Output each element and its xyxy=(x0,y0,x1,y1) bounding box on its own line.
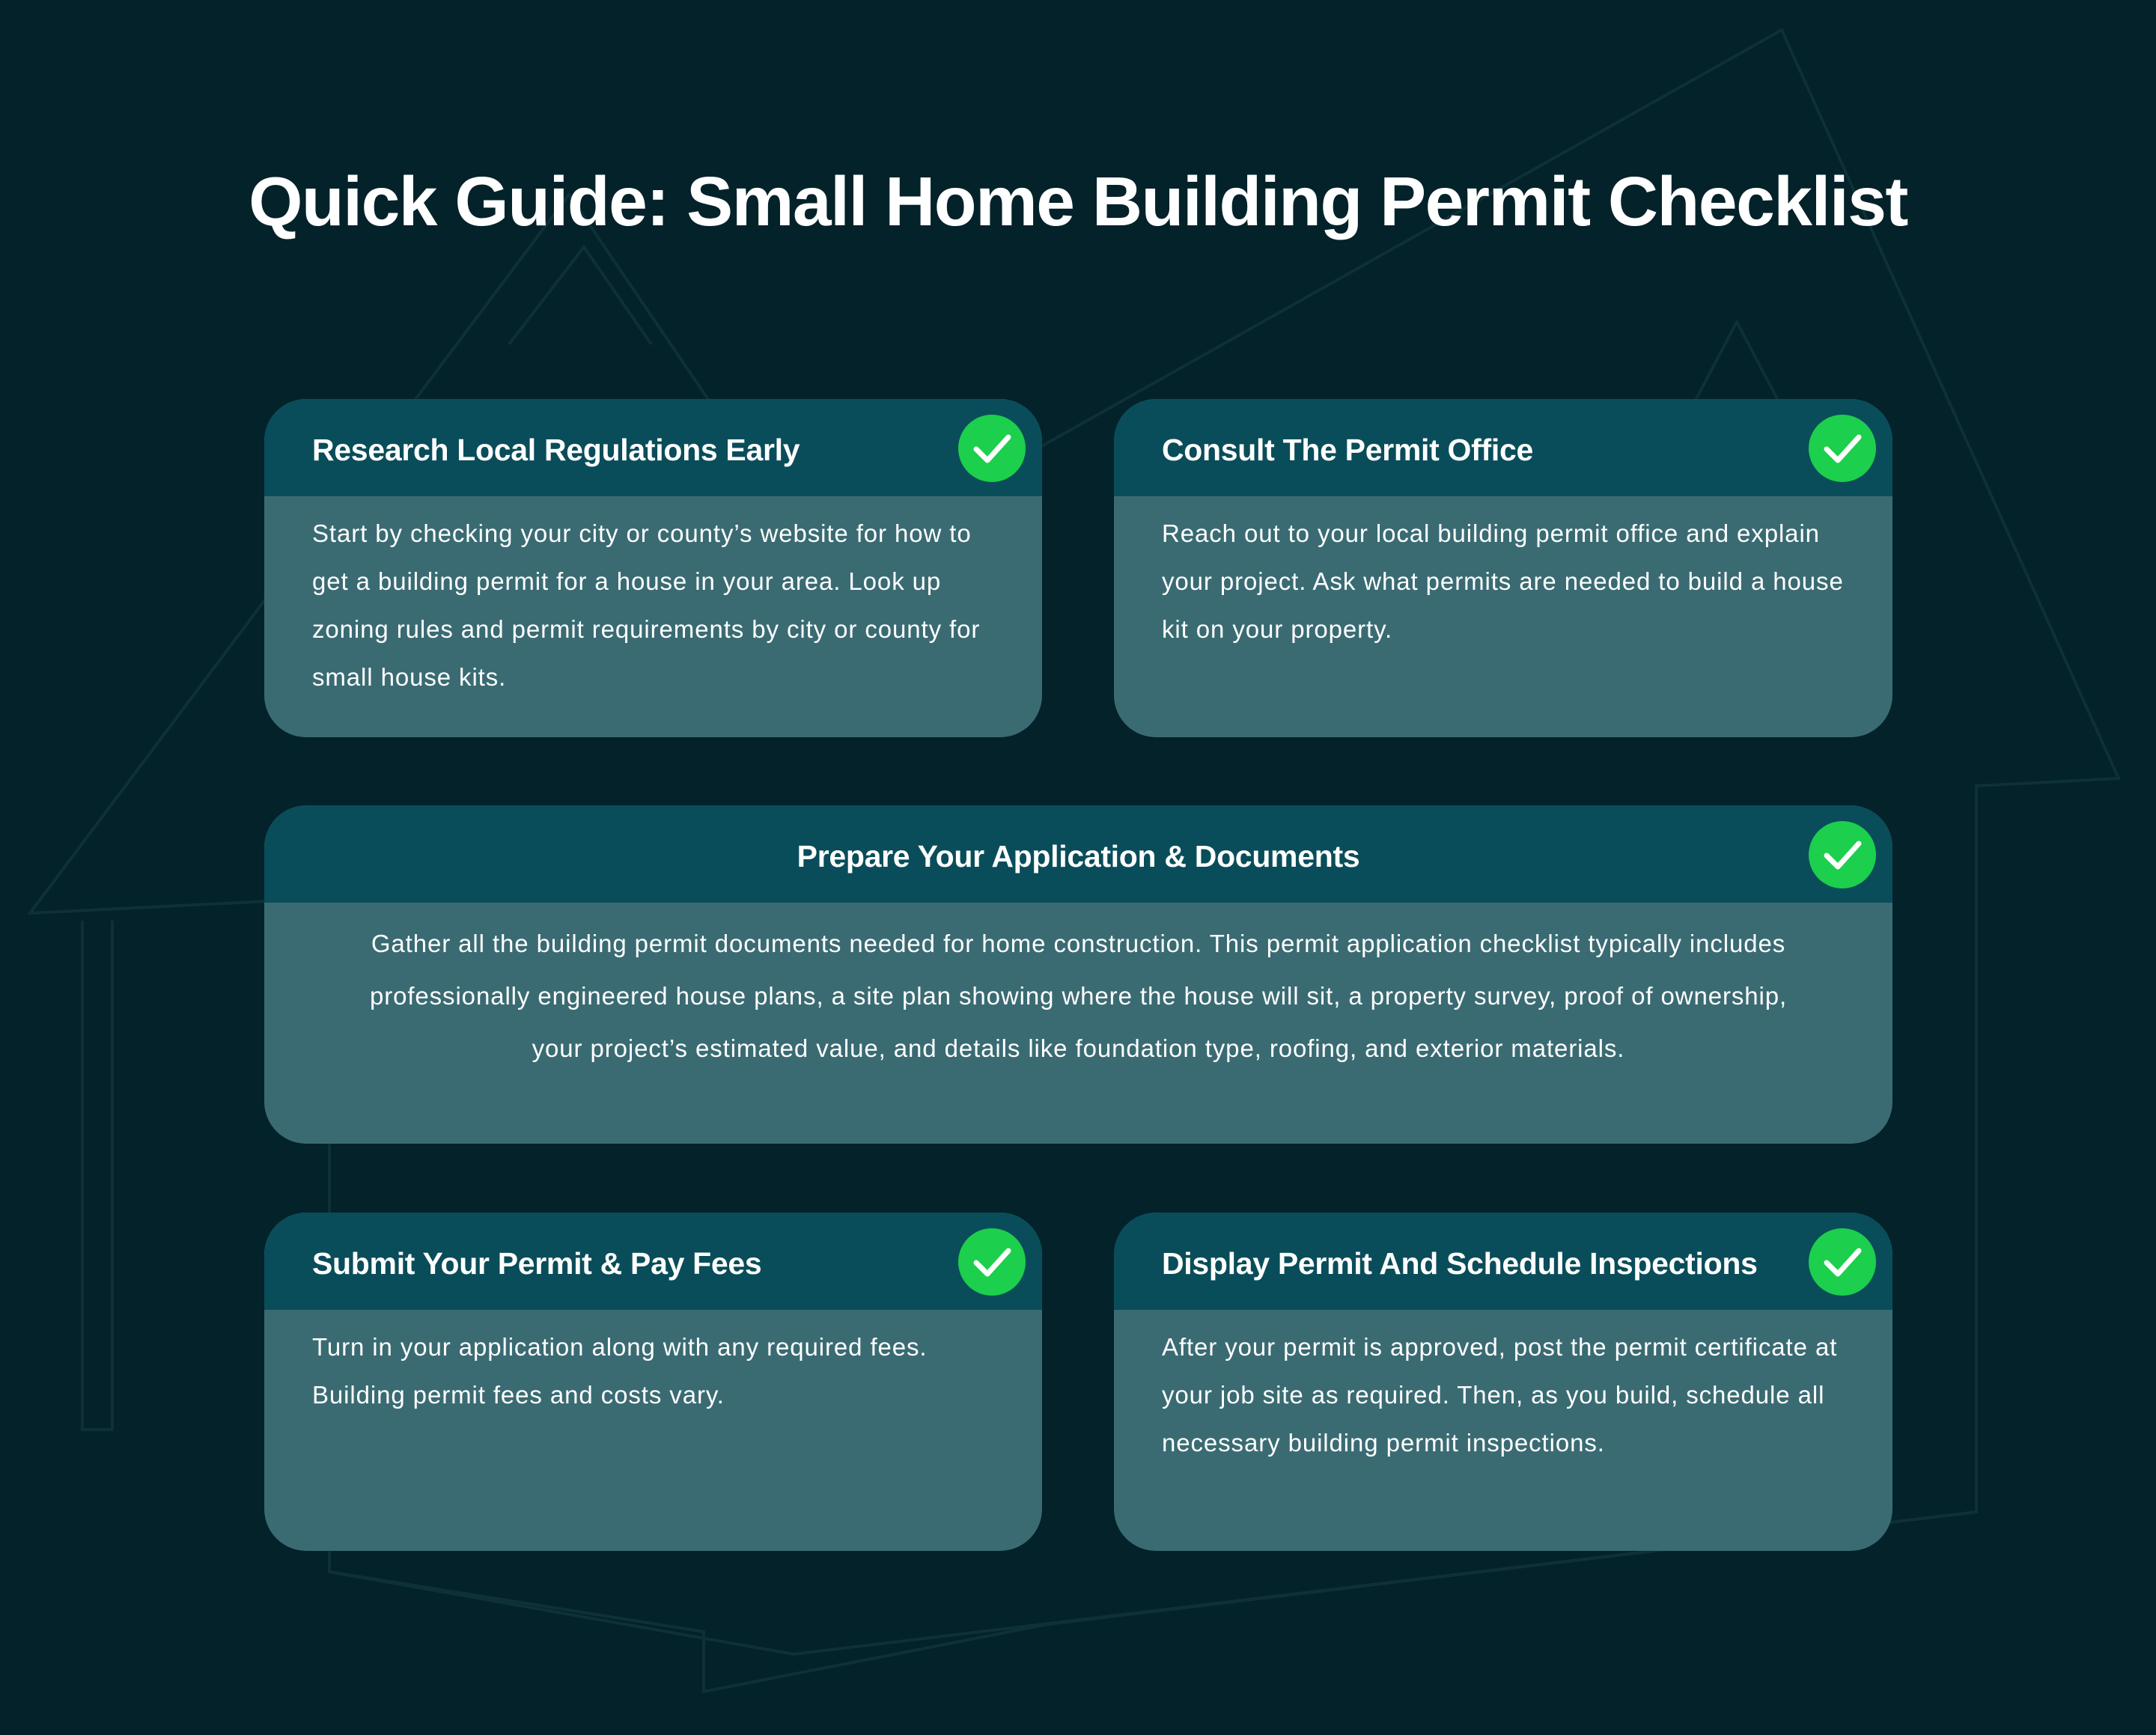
heading xyxy=(264,399,1042,496)
panel: submit permit xyxy=(264,1213,1042,1551)
text block: After your permit is approved, post the permit certificate at your job site as required. Then, as you build, schedule all necessary building permit inspections. xyxy=(1162,1333,1837,1457)
text block: Turn in your application along with any required fees. Building permit fees and costs vary. xyxy=(312,1333,927,1409)
panel: display permit xyxy=(1114,1213,1892,1551)
heading: Display Permit And Schedule Inspections xyxy=(1162,1246,1758,1281)
heading: Prepare Your Application & Documents xyxy=(797,839,1359,873)
panel: research local regulations xyxy=(264,399,1042,737)
heading xyxy=(1114,399,1892,496)
panel: prepare application xyxy=(264,805,1892,1144)
heading xyxy=(264,1213,1042,1310)
title: Quick Guide: Small Home Building Permit Checklist xyxy=(249,162,1907,240)
heading: Consult The Permit Office xyxy=(1162,433,1533,467)
text block: Start by checking your city or county’s website for how to get a building permit for a house in your area. Look up zoning rules and permit requirements by city or county for small house kits. xyxy=(312,519,980,691)
heading xyxy=(264,805,1892,903)
heading xyxy=(1114,1213,1892,1310)
text block: Gather all the building permit documents needed for home construction. This permit application checklist typically includes professionally engineered house plans, a site plan showing where the house will sit, a property survey, proof of ownership, your project’s estimated value, and details like foundation type, roofing, and exterior materials. xyxy=(370,930,1787,1062)
panel: consult permit office xyxy=(1114,399,1892,737)
heading: Submit Your Permit & Pay Fees xyxy=(312,1246,761,1281)
text block: Reach out to your local building permit office and explain your project. Ask what permits are needed to build a house kit on your property. xyxy=(1162,519,1844,643)
heading: Research Local Regulations Early xyxy=(312,433,800,467)
